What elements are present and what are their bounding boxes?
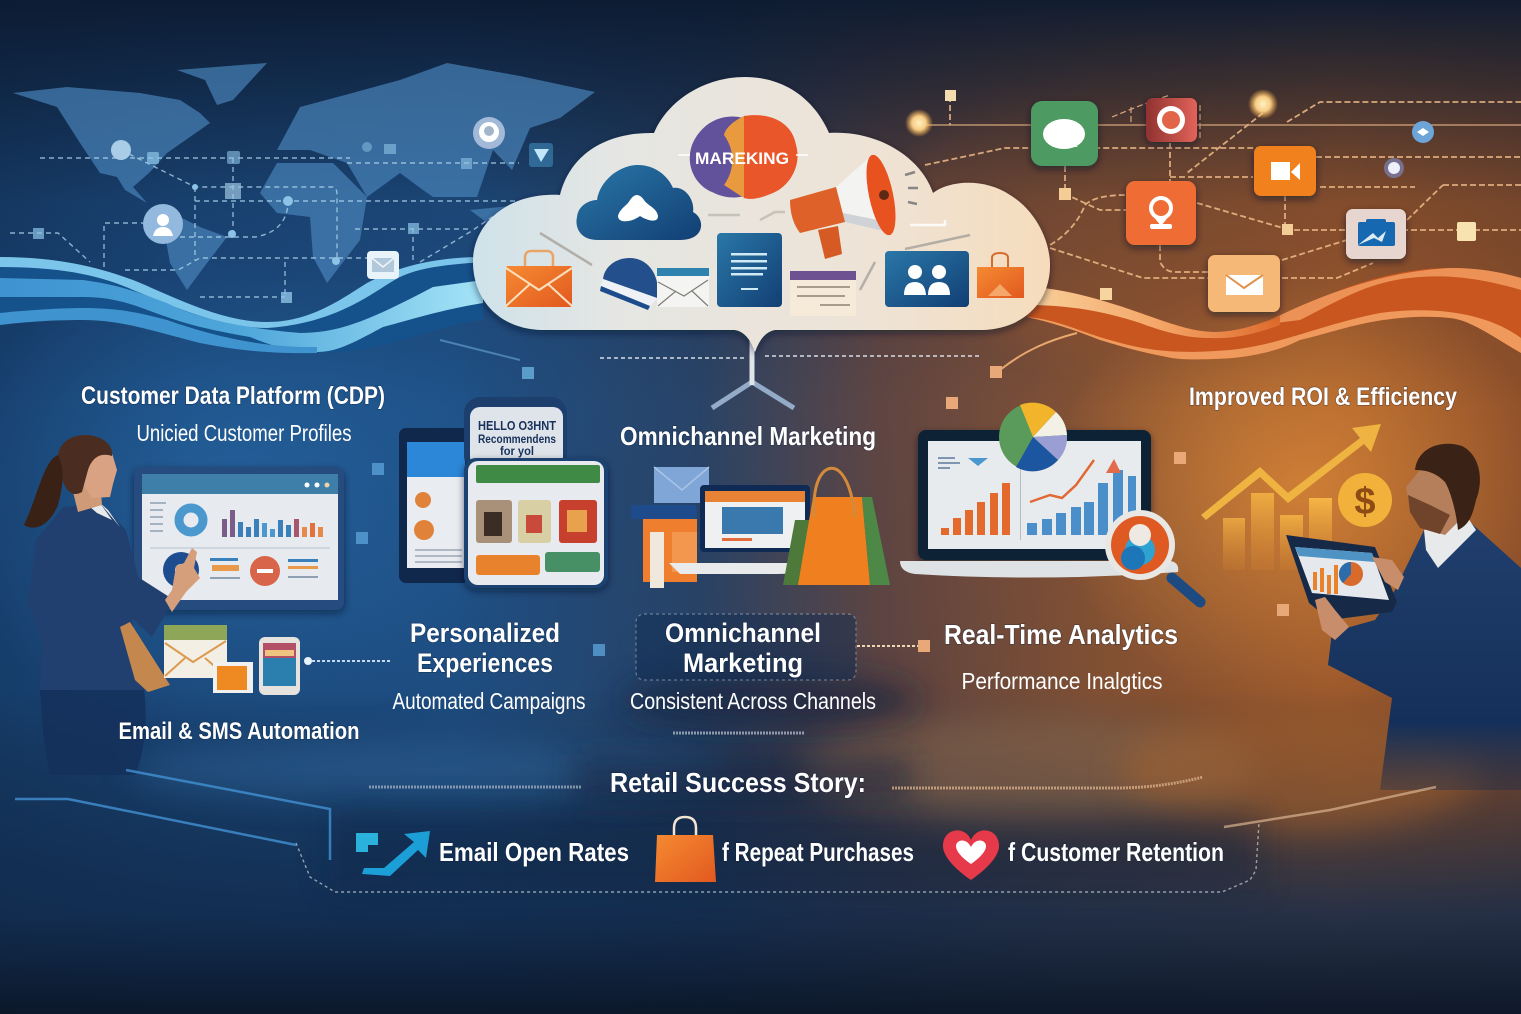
icon: photo card [1346,209,1406,259]
icon: people card [885,251,969,307]
heading: ROI: Improved ROI & Efficiency [1189,383,1457,411]
orange wave ribbons [1000,268,1521,370]
omnichannel box: Omnichannel [665,618,821,648]
cloud connector [600,340,980,408]
metric: customer retention: f Customer Retention [1008,837,1224,867]
network lines left [10,150,519,297]
world map [13,63,595,290]
icon: marketing brain [678,115,808,199]
heading: personalized experiences: Experiences [417,648,553,678]
phones: personalized: for yol [500,444,534,458]
icon: marketing brain: MAREKING [695,149,789,168]
icon: document tablet [717,233,782,307]
connector strokes in cloud [540,172,970,290]
bar chart: orange [941,483,1010,535]
network nodes left [33,140,534,379]
icon: chat bubble [1031,101,1098,166]
man with tablet [1286,444,1521,790]
omnichannel box: Consistent Across Channels [630,688,876,714]
network lines right [920,95,1521,278]
icon: megaphone [790,152,901,259]
heading: retail success story: Retail Success Story: [610,767,866,798]
trend line [1030,459,1121,502]
phones: personalized [399,397,608,588]
pie chart [999,403,1067,471]
heading: personalized experiences: Personalized [410,618,560,648]
omnichannel box: Marketing [683,648,803,678]
network nodes right [905,89,1476,300]
icon: map pin [473,117,505,149]
analytics laptop [900,403,1200,602]
results box outline [15,733,1436,892]
heading: omnichannel marketing: Omnichannel Marketing [620,421,876,451]
bar chart [222,510,323,537]
woman presenter [24,435,200,775]
icon: check badge [529,143,553,167]
icon: camera [1146,98,1197,142]
heading: personalized experiences [392,618,586,714]
icon: video [1254,146,1316,196]
metric: repeat purchases: f Repeat Purchases [722,837,914,867]
icon: blue cap card [600,258,658,310]
blue wave ribbons [0,257,520,360]
dashed connector to analytics [857,640,930,652]
omnichannel box [630,614,876,714]
heading: CDP: Customer Data Platform (CDP) [81,382,385,410]
metric: repeat purchases [655,817,914,882]
phones: personalized: Recommendens [478,432,556,446]
icon: form card [790,271,856,316]
tablet [1286,535,1397,620]
icon: email window [657,268,709,307]
dashed connector to personalized [304,657,392,665]
heading: real-time analytics [944,619,1178,694]
magnifying glass [1105,510,1200,602]
icon: lightbulb [1126,181,1196,245]
cloud: marketing hub [473,77,1050,352]
icon: orange envelope bag [506,251,572,307]
icon: orange bag [977,253,1024,298]
omnichannel illustration [631,467,890,588]
heading: email and SMS: Email & SMS Automation [118,718,360,745]
dashboard screen [134,467,344,610]
email and SMS icons [164,625,300,695]
phones: personalized: HELLO O3HNT [478,418,556,433]
heading: real-time analytics: Performance Inalgtics [962,668,1162,694]
heading: CDP [81,382,385,446]
icon: user pin [143,204,183,244]
metric: email open rates [356,831,629,876]
heading: real-time analytics: Real-Time Analytics [944,619,1178,650]
bar chart: blue [1027,470,1136,535]
icon: envelope left [367,251,399,279]
heading: personalized experiences: Automated Campaigns [392,688,586,714]
metric: customer retention [943,830,1224,880]
heading: CDP: Unicied Customer Profiles [136,420,352,446]
connector squares right [946,366,1289,616]
ROI growth chart: $ [1354,481,1376,523]
icon: envelope right [1208,255,1280,312]
metric: email open rates: Email Open Rates [439,837,629,867]
icon: blue cloud [576,165,701,240]
connector squares [356,463,605,656]
ROI growth chart [1201,424,1392,570]
